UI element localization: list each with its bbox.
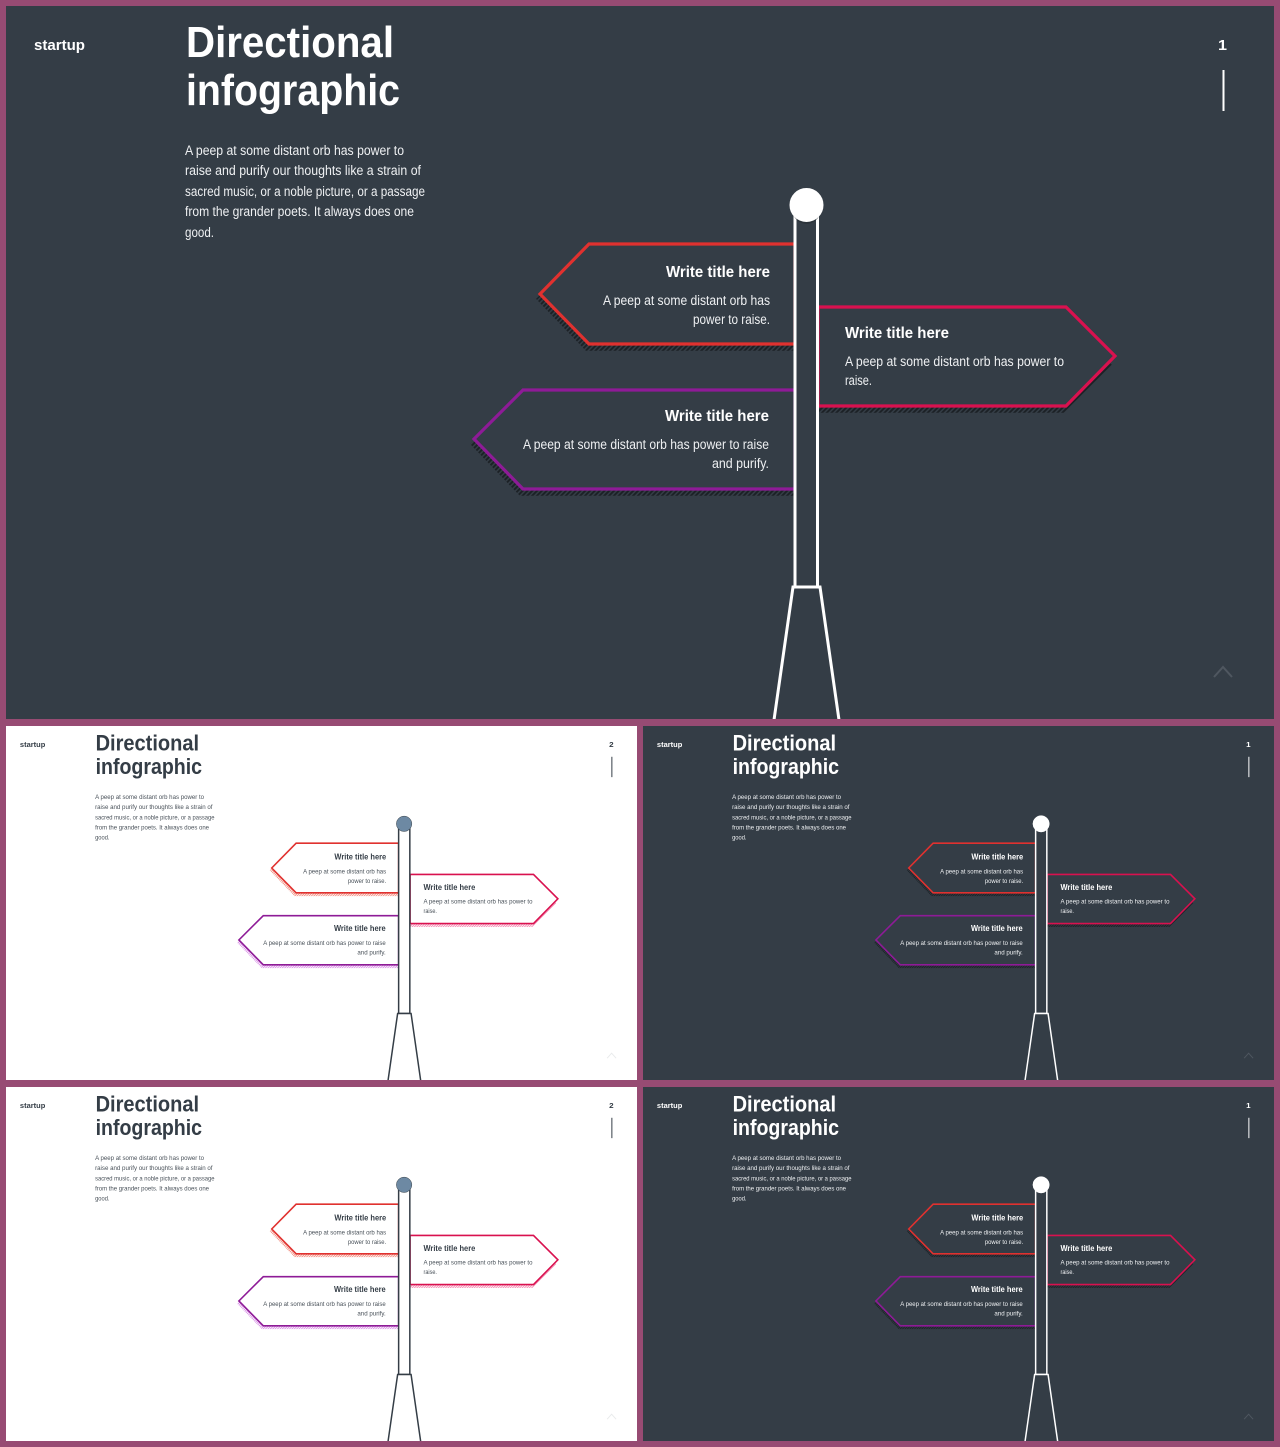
- sign: pink right arrow: [1047, 1235, 1195, 1287]
- sign: pink right arrow: raise.: [1061, 1269, 1074, 1276]
- sign: red left arrow: Write title here: [971, 1214, 1024, 1223]
- sign: red left arrow: power to raise.: [985, 878, 1023, 885]
- logo: startup: startup: [657, 740, 683, 749]
- heading: infographic: [186, 66, 400, 115]
- sign: pink right arrow: Write title here: [1061, 883, 1113, 892]
- sign: pink right arrow: Write title here: [424, 1244, 476, 1253]
- sign: purple left arrow: Write title here: [971, 924, 1023, 933]
- icon: up chevron: [1244, 1053, 1253, 1058]
- sign: pink right arrow: raise.: [424, 908, 437, 915]
- panel: small light slide 2: [6, 726, 637, 1080]
- sign: purple left arrow: A peep at some distant orb has power to raise: [263, 940, 386, 947]
- sign: red left arrow: [908, 1204, 1036, 1256]
- icon: up chevron: [1214, 667, 1232, 677]
- heading: infographic: [733, 754, 839, 779]
- text block: intro: raise and purify our thoughts like a strain of: [732, 804, 850, 811]
- sign: purple left arrow: Write title here: [334, 1285, 386, 1294]
- sign: purple left arrow: [875, 1277, 1036, 1328]
- page number: 2: [609, 740, 614, 749]
- panel: small dark slide 5: [643, 1087, 1274, 1441]
- page number: 2: [609, 1101, 614, 1110]
- page number: 1: [1246, 1101, 1251, 1110]
- sign: pink right arrow: [1047, 874, 1195, 926]
- text block: intro: A peep at some distant orb has power to: [732, 794, 841, 801]
- heading: Directional: [733, 730, 836, 755]
- post base: [772, 587, 841, 736]
- sign: red left arrow: A peep at some distant orb has: [940, 1229, 1024, 1236]
- heading: infographic: [96, 754, 202, 779]
- post shaft: [795, 211, 818, 587]
- text block: intro: sacred music, or a noble picture, or a passage: [732, 1175, 852, 1182]
- panel: small light slide 4: [6, 1087, 637, 1441]
- post shaft: [399, 827, 410, 1013]
- text block: intro: raise and purify our thoughts like a strain of: [185, 163, 421, 178]
- sign: purple left arrow: A peep at some distant orb has power to raise: [263, 1301, 386, 1308]
- sign: red left arrow: [271, 843, 399, 895]
- text block: intro: from the grander poets. It always does one: [732, 1185, 846, 1192]
- sign: red left arrow: Write title here: [666, 264, 770, 281]
- heading: Directional: [733, 1091, 836, 1116]
- sign: pink right arrow: Write title here: [845, 325, 949, 342]
- post shaft: [399, 1188, 410, 1374]
- sign: purple left arrow: [238, 916, 399, 967]
- heading: Directional: [96, 1091, 199, 1116]
- text block: intro: from the grander poets. It always does one: [95, 1185, 209, 1192]
- text block: intro: good.: [95, 835, 110, 842]
- sign: purple left arrow: Write title here: [971, 1285, 1023, 1294]
- text block: intro: [732, 794, 852, 842]
- text block: intro: [95, 794, 215, 842]
- text block: intro: sacred music, or a noble picture, or a passage: [95, 814, 215, 821]
- logo: startup: startup: [20, 1101, 46, 1110]
- sign: red left arrow: [908, 843, 1036, 895]
- post base: [1024, 1013, 1059, 1087]
- text block: intro: from the grander poets. It always does one: [95, 824, 209, 831]
- post cap: [790, 188, 823, 224]
- text block: intro: raise and purify our thoughts like a strain of: [732, 1165, 850, 1172]
- page marker line: [1248, 1118, 1250, 1138]
- sign: red left arrow: power to raise.: [348, 1239, 386, 1246]
- heading: infographic: [733, 1115, 839, 1140]
- post base: [387, 1374, 422, 1447]
- text block: intro: good.: [185, 225, 214, 240]
- post cap: [1033, 1177, 1049, 1193]
- sign: pink right arrow: A peep at some distant orb has power to: [1061, 1260, 1170, 1267]
- text block: intro: raise and purify our thoughts like a strain of: [95, 804, 213, 811]
- sign: purple left arrow: A peep at some distant orb has power to raise: [523, 437, 769, 452]
- sign: purple left arrow: [875, 916, 1036, 967]
- text block: intro: good.: [732, 1196, 747, 1203]
- sign: pink right arrow: raise.: [845, 373, 872, 388]
- logo: startup: startup: [34, 37, 85, 54]
- post shaft: [1036, 1188, 1047, 1374]
- text block: intro: A peep at some distant orb has power to: [732, 1155, 841, 1162]
- sign: red left arrow: A peep at some distant orb has: [303, 868, 387, 875]
- sign: pink right arrow: A peep at some distant orb has power to: [424, 899, 533, 906]
- sign: red left arrow: A peep at some distant orb has: [940, 868, 1024, 875]
- sign: purple left arrow: and purify.: [357, 949, 386, 956]
- icon: up chevron: [1244, 1414, 1253, 1419]
- sign: purple left arrow: and purify.: [994, 1310, 1023, 1317]
- sign: red left arrow: A peep at some distant orb has: [303, 1229, 387, 1236]
- text block: intro: good.: [732, 835, 747, 842]
- sign: purple left arrow: [472, 390, 795, 493]
- sign: red left arrow: A peep at some distant orb has: [603, 293, 770, 308]
- signpost: [875, 1177, 1195, 1447]
- text block: intro: [732, 1155, 852, 1203]
- text block: intro: from the grander poets. It always does one: [185, 204, 414, 219]
- sign: pink right arrow: A peep at some distant orb has power to: [1061, 899, 1170, 906]
- logo: startup: startup: [20, 740, 46, 749]
- sign: purple left arrow: and purify.: [357, 1310, 386, 1317]
- text block: intro: good.: [95, 1196, 110, 1203]
- sign: red left arrow: power to raise.: [985, 1239, 1023, 1246]
- text block: intro: sacred music, or a noble picture, or a passage: [732, 814, 852, 821]
- page number: 1: [1246, 740, 1251, 749]
- post cap: [396, 1177, 412, 1193]
- page marker line: [1222, 70, 1224, 111]
- heading: [186, 18, 400, 115]
- post cap: [396, 816, 412, 832]
- text block: intro: A peep at some distant orb has power to: [185, 143, 404, 158]
- sign: pink right arrow: [410, 1235, 558, 1287]
- text block: intro: [95, 1155, 215, 1203]
- sign: purple left arrow: [238, 1277, 399, 1328]
- post shaft: [1036, 827, 1047, 1013]
- sign: red left arrow: [538, 244, 795, 348]
- post cap: [1033, 816, 1049, 832]
- text block: intro: A peep at some distant orb has power to: [95, 1155, 204, 1162]
- heading: infographic: [96, 1115, 202, 1140]
- sign: red left arrow: Write title here: [334, 853, 387, 862]
- heading: [96, 730, 202, 779]
- sign: pink right arrow: Write title here: [424, 883, 476, 892]
- signpost: [238, 816, 558, 1087]
- sign: red left arrow: power to raise.: [693, 312, 770, 327]
- sign: red left arrow: power to raise.: [348, 878, 386, 885]
- text block: intro: A peep at some distant orb has power to: [95, 794, 204, 801]
- post base: [1024, 1374, 1059, 1447]
- text block: intro: sacred music, or a noble picture, or a passage: [95, 1175, 215, 1182]
- sign: pink right arrow: raise.: [424, 1269, 437, 1276]
- sign: purple left arrow: and purify.: [712, 456, 769, 471]
- post base: [387, 1013, 422, 1087]
- page marker line: [1248, 757, 1250, 777]
- signpost: [238, 1177, 558, 1447]
- sign: pink right arrow: [818, 307, 1115, 410]
- logo: startup: startup: [657, 1101, 683, 1110]
- text block: intro: raise and purify our thoughts like a strain of: [95, 1165, 213, 1172]
- sign: pink right arrow: [410, 874, 558, 926]
- sign: pink right arrow: Write title here: [1061, 1244, 1113, 1253]
- sign: pink right arrow: raise.: [1061, 908, 1074, 915]
- sign: pink right arrow: A peep at some distant orb has power to: [845, 354, 1064, 369]
- sign: purple left arrow: A peep at some distant orb has power to raise: [900, 940, 1023, 947]
- text block: intro: from the grander poets. It always does one: [732, 824, 846, 831]
- page marker line: [611, 1118, 613, 1138]
- heading: [733, 1091, 839, 1140]
- icon: up chevron: [607, 1414, 616, 1419]
- heading: Directional: [96, 730, 199, 755]
- icon: up chevron: [607, 1053, 616, 1058]
- text block: intro: sacred music, or a noble picture, or a passage: [185, 184, 425, 199]
- sign: purple left arrow: and purify.: [994, 949, 1023, 956]
- sign: purple left arrow: A peep at some distant orb has power to raise: [900, 1301, 1023, 1308]
- heading: [733, 730, 839, 779]
- page number: 1: [1218, 37, 1227, 54]
- heading: Directional: [186, 18, 394, 67]
- sign: red left arrow: Write title here: [334, 1214, 387, 1223]
- page marker line: [611, 757, 613, 777]
- sign: pink right arrow: A peep at some distant orb has power to: [424, 1260, 533, 1267]
- panel: small dark slide 3: [643, 726, 1274, 1080]
- heading: [96, 1091, 202, 1140]
- sign: purple left arrow: Write title here: [334, 924, 386, 933]
- signpost: [472, 188, 1115, 736]
- sign: red left arrow: [271, 1204, 399, 1256]
- sign: purple left arrow: Write title here: [665, 408, 769, 425]
- sign: red left arrow: Write title here: [971, 853, 1024, 862]
- panel: large dark slide 1: [6, 6, 1274, 719]
- text block: intro: [185, 143, 425, 240]
- signpost: [875, 816, 1195, 1087]
